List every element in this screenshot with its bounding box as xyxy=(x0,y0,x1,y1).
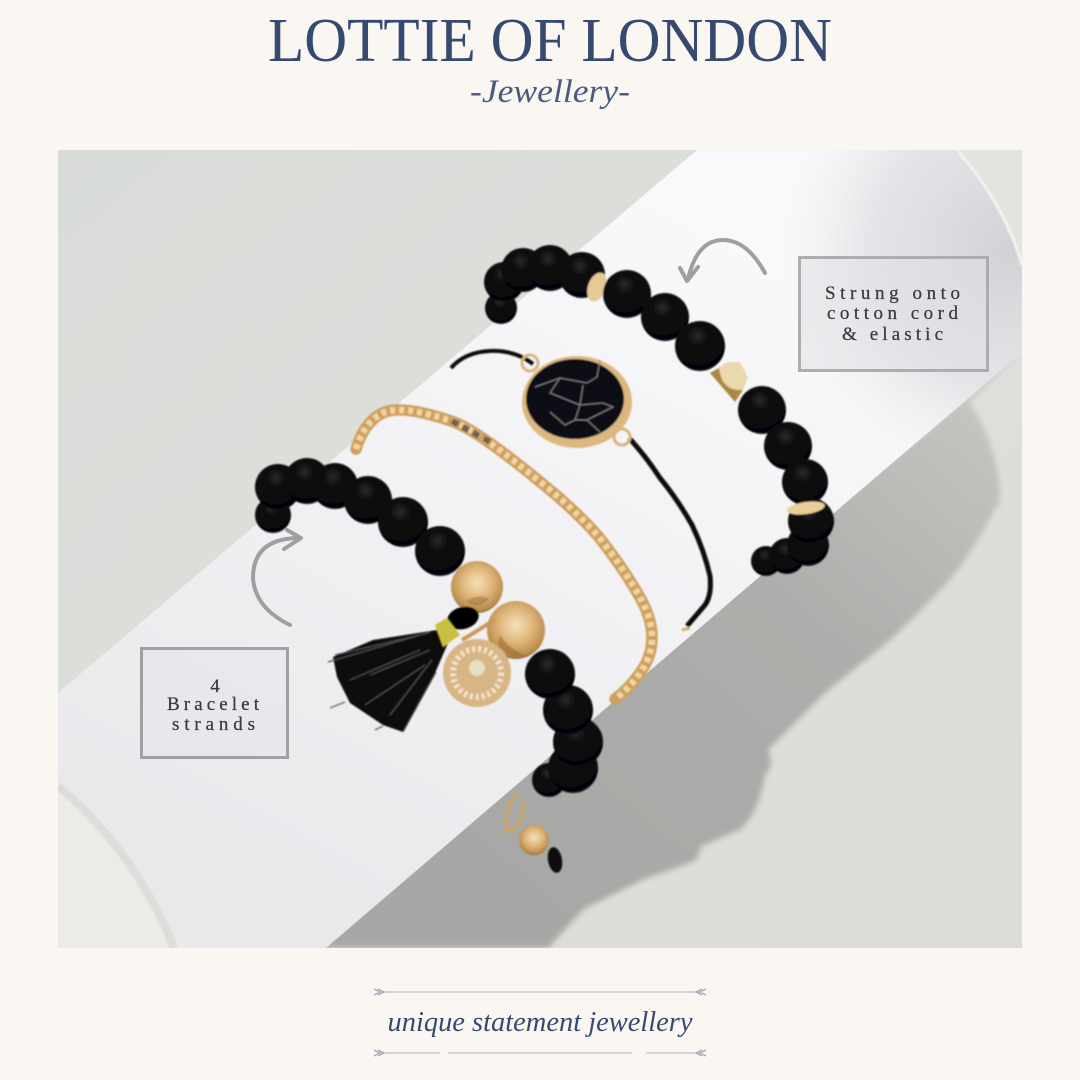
cylinder shadow xyxy=(300,352,1022,948)
extender chain xyxy=(506,793,524,833)
callout: cord note xyxy=(800,258,988,370)
bottom ornamental divider xyxy=(374,1050,706,1056)
callout: cord note: Strung onto xyxy=(825,283,960,304)
tagline: unique statement jewellery xyxy=(388,1007,693,1038)
arrow: top right xyxy=(680,240,765,281)
subtitle: -Jewellery- xyxy=(470,74,630,110)
callout: strand count xyxy=(142,648,288,758)
gold chain bracelet xyxy=(356,410,652,699)
beaded bracelet: lower left with tassel xyxy=(255,458,603,874)
gold beads xyxy=(451,561,503,613)
black cord bracelet with marble pendant xyxy=(451,351,710,630)
pendant loops xyxy=(522,355,538,371)
photo ground surface xyxy=(58,150,1022,948)
tassel head xyxy=(446,606,480,630)
shaded cylinder end xyxy=(827,150,1022,434)
tassel xyxy=(333,630,448,732)
bright rim of cylinder end xyxy=(957,150,1022,265)
callout: strand count: 4 xyxy=(210,676,220,697)
cylinder end cap xyxy=(58,783,178,948)
top ornamental divider xyxy=(374,989,706,995)
callout: strand count: Bracelet xyxy=(167,694,260,715)
callout: cord note: & elastic xyxy=(842,324,943,345)
panel: product photo xyxy=(58,150,1022,948)
light ground behind cylinder end xyxy=(940,150,1022,300)
beaded bracelet: top right xyxy=(484,245,834,576)
cord xyxy=(451,351,533,368)
white display cylinder xyxy=(58,150,1022,948)
pendant xyxy=(522,356,632,448)
title: LOTTIE OF LONDON xyxy=(268,7,832,75)
arrow: lower left xyxy=(253,530,301,625)
callout: cord note: cotton cord xyxy=(827,303,958,324)
tassel band xyxy=(435,618,460,647)
coin charm xyxy=(443,639,511,707)
charm loop xyxy=(462,620,494,640)
callout: strand count: strands xyxy=(172,714,255,735)
